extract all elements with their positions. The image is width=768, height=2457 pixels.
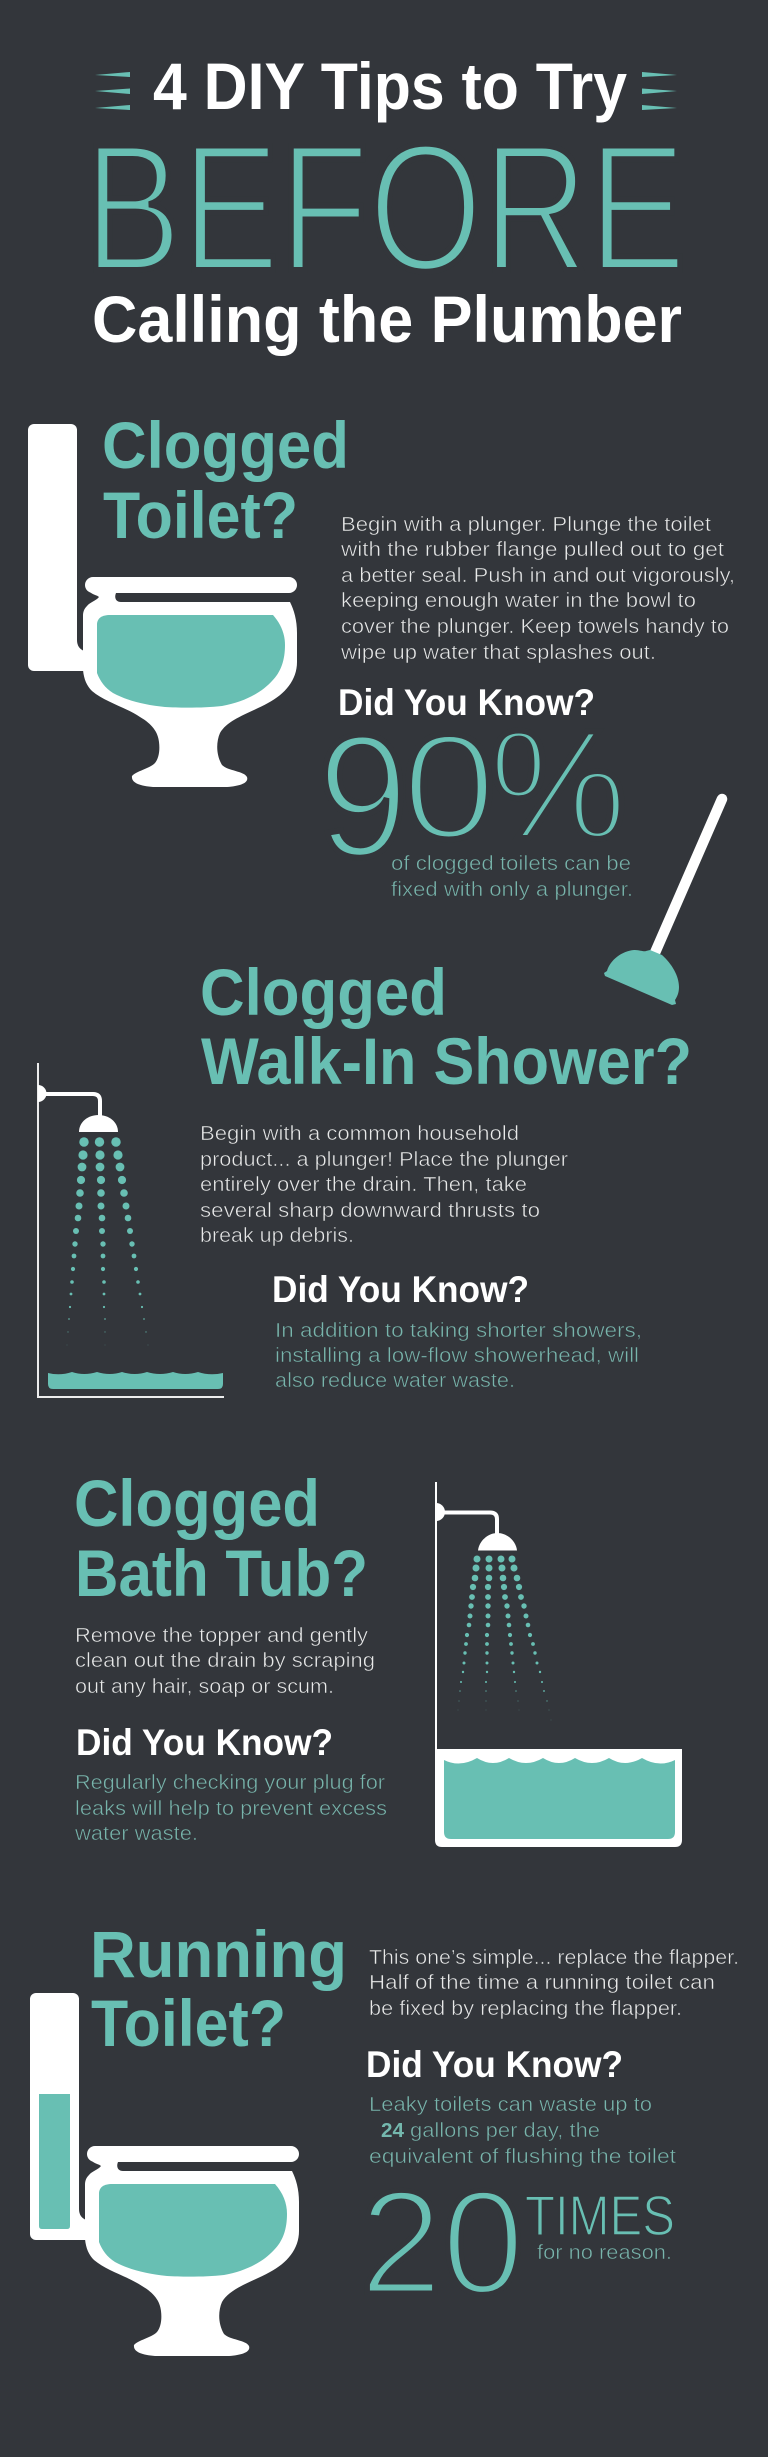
text block: plunger instructions	[340, 514, 735, 664]
heading: did you know: Did You Know?	[338, 682, 595, 723]
text block: bath tub instructions: out any hair, soap or scum.	[75, 1676, 334, 1698]
heading: Running Toilet?: Running	[90, 1917, 347, 1991]
heading: Running Toilet?: Toilet?	[91, 1986, 286, 2060]
text block: shower fact: installing a low-flow showerhead, will	[275, 1345, 639, 1367]
text block: leaky toilet fact: 24	[381, 2120, 405, 2142]
heading: Clogged Bath Tub?	[74, 1466, 368, 1610]
heading: did you know: Did You Know?	[272, 1269, 529, 1310]
caption: 90 percent: of clogged toilets can be	[391, 853, 631, 875]
panel: clogged toilet	[28, 408, 735, 1005]
text block: shower instructions: product... a plunger! Place the plunger	[200, 1149, 568, 1171]
heading: Clogged Toilet?: Toilet?	[103, 478, 298, 552]
heading: did you know: Did You Know?	[76, 1722, 333, 1763]
text block: bath tub fact: leaks will help to prevent excess	[75, 1798, 387, 1820]
stat: 90 percent: 0	[402, 703, 496, 870]
text block: plunger instructions: Begin with a plunger. Plunge the toilet	[341, 514, 711, 536]
heading: Clogged Walk-In Shower?	[200, 955, 692, 1098]
heading: Clogged Toilet?: Clogged	[102, 408, 349, 482]
text block: plunger instructions: cover the plunger. Keep towels handy to	[341, 616, 729, 638]
text block: shower instructions: several sharp downward thrusts to	[200, 1200, 540, 1222]
text block: shower fact: In addition to taking shorter showers,	[275, 1320, 642, 1342]
caption: 90 percent	[391, 853, 633, 901]
text block: plunger instructions: keeping enough water in the bowl to	[341, 590, 696, 612]
stat: 20 times	[360, 2161, 675, 2325]
text block: bath tub fact: Regularly checking your plug for	[75, 1772, 385, 1794]
text block: flapper instructions: Half of the time a running toilet can	[369, 1972, 715, 1994]
heading: did you know: Did You Know?	[366, 2044, 623, 2085]
title line: Calling the Plumber: Calling the Plumber	[92, 282, 682, 356]
stat: 20 times: TIMES	[525, 2184, 675, 2248]
text block: shower instructions: Begin with a common household	[200, 1123, 519, 1145]
text block: shower instructions: break up debris.	[200, 1225, 354, 1247]
icon: right accent dashes	[642, 72, 677, 110]
text block: flapper instructions	[369, 1947, 739, 2020]
text block: bath tub fact: water waste.	[74, 1823, 198, 1845]
text block: plunger instructions: with the rubber flange pulled out to get	[340, 539, 724, 561]
text block: shower instructions	[200, 1123, 568, 1247]
text block: bath tub instructions: Remove the topper and gently	[75, 1625, 368, 1647]
panel: running toilet	[30, 1917, 739, 2356]
text block: leaky toilet fact: gallons per day, the	[410, 2120, 600, 2142]
text block: leaky toilet fact: Leaky toilets can waste up to	[369, 2094, 652, 2116]
title line: 4 DIY Tips to Try: 4 DIY Tips to Try	[153, 49, 627, 123]
stat: 20 times: for no reason.	[537, 2242, 672, 2264]
text block: bath tub instructions	[75, 1625, 375, 1698]
text block: plunger instructions: a better seal. Push in and out vigorously,	[341, 565, 735, 587]
stat: 20 times: 20	[360, 2161, 524, 2325]
icon: toilet	[28, 424, 297, 787]
heading: Running Toilet?	[90, 1917, 347, 2060]
text block: flapper instructions: be fixed by replacing the flapper.	[369, 1998, 682, 2020]
icon: left accent dashes	[95, 72, 130, 110]
panel: clogged bath tub	[74, 1466, 682, 1847]
heading: Clogged Bath Tub?: Bath Tub?	[75, 1536, 368, 1610]
title	[84, 49, 686, 356]
heading: Clogged Walk-In Shower?: Clogged	[200, 955, 447, 1029]
heading: Clogged Walk-In Shower?: Walk-In Shower?	[201, 1024, 692, 1098]
icon: running toilet with tank water	[30, 1993, 299, 2356]
caption: 90 percent: fixed with only a plunger.	[391, 879, 633, 901]
text block: bath tub fact	[74, 1772, 387, 1845]
text block: shower fact: also reduce water waste.	[275, 1370, 515, 1392]
text block: bath tub instructions: clean out the drain by scraping	[75, 1650, 375, 1672]
text block: flapper instructions: This one’s simple... replace the flapper.	[369, 1947, 739, 1969]
icon: plunger	[604, 799, 722, 1005]
icon: walk-in shower	[38, 1063, 224, 1397]
text block: shower fact	[275, 1320, 642, 1392]
stat: 90 percent	[318, 698, 627, 893]
text block: leaky toilet fact: equivalent of flushing the toilet	[369, 2146, 676, 2168]
text block: plunger instructions: wipe up water that splashes out.	[340, 642, 656, 664]
heading: Clogged Toilet?	[102, 408, 349, 552]
heading: Clogged Bath Tub?: Clogged	[74, 1466, 320, 1540]
text block: shower instructions: entirely over the drain. Then, take	[200, 1174, 527, 1196]
text block: leaky toilet fact	[369, 2094, 676, 2168]
stat: 90 percent: %	[489, 698, 627, 871]
icon: shower over bath tub	[435, 1482, 682, 1847]
stat: 90 percent: 9	[318, 698, 408, 893]
panel: clogged walk-in shower	[38, 955, 692, 1397]
